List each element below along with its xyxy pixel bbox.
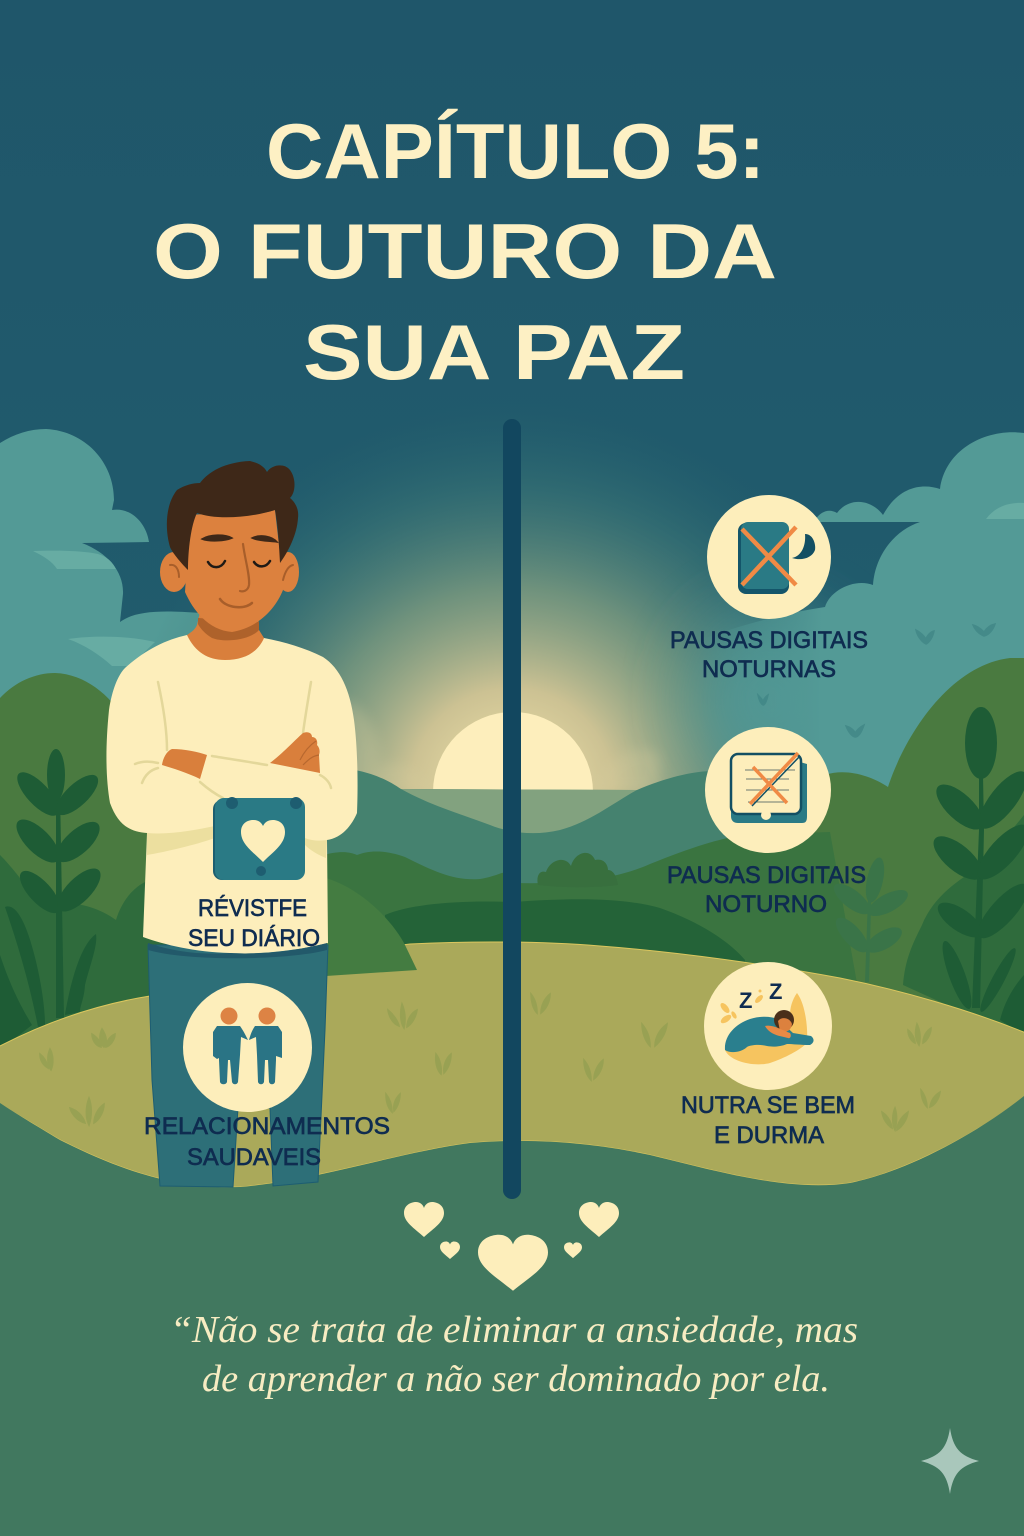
arms	[162, 749, 207, 779]
left green hill	[0, 673, 170, 1060]
label: relacionamentos saudaveis	[144, 1113, 390, 1171]
middle green hill	[320, 832, 860, 1000]
label: pausas digitais noturno: PAUSAS DIGITAIS	[667, 862, 866, 889]
label: relacionamentos saudaveis: SAUDAVEIS	[187, 1144, 321, 1171]
sun glow	[100, 400, 924, 970]
label: revisite seu diario: SEU DIÁRIO	[188, 925, 320, 952]
icon: sleeping person	[704, 962, 832, 1090]
label: pausas digitais noturnas	[670, 627, 868, 683]
grass tufts	[40, 994, 940, 1130]
facial features	[170, 535, 293, 607]
clouds right	[695, 432, 1024, 800]
title: CAPÍTULO 5:	[266, 107, 765, 195]
label: pausas digitais noturnas: NOTURNAS	[702, 656, 836, 683]
right green hill	[640, 658, 1024, 1060]
label: revisite seu diario: RÉVISTFE	[198, 895, 307, 922]
central divider bar	[503, 419, 521, 1199]
ears	[160, 552, 299, 592]
distant teal hills	[320, 768, 860, 930]
label: revisite seu diario	[188, 895, 320, 952]
bush	[537, 853, 618, 887]
label: nutra se bem e durma: NUTRA SE BEM	[681, 1092, 855, 1119]
label: relacionamentos saudaveis: RELACIONAMENTOS	[144, 1113, 390, 1140]
background sky	[0, 0, 1024, 1200]
sweater shading	[135, 682, 331, 798]
hearts	[404, 1202, 619, 1291]
hair	[167, 461, 298, 570]
bottom band	[0, 1096, 1024, 1536]
diary icon	[213, 797, 305, 880]
front-left hill	[326, 878, 417, 976]
icon: sleeping person: Z	[739, 988, 752, 1013]
quote: “Não se trata de eliminar a ansiedade, mas	[170, 1309, 858, 1351]
sparkle star	[921, 1428, 979, 1494]
neck	[187, 612, 264, 668]
label: nutra se bem e durma: E DURMA	[714, 1122, 824, 1149]
label: nutra se bem e durma	[681, 1092, 855, 1149]
meadow	[0, 942, 1024, 1187]
neck shadow	[198, 618, 259, 640]
icon: relationships	[183, 983, 312, 1112]
label: pausas digitais noturno: NOTURNO	[705, 891, 827, 918]
pale clouds near sun	[345, 700, 661, 792]
trousers	[148, 945, 328, 1187]
quote	[170, 1309, 858, 1400]
sun	[433, 712, 593, 872]
darker green undergrowth left	[0, 855, 170, 1060]
title: SUA PAZ	[303, 308, 685, 396]
icon: mug with x	[707, 495, 831, 619]
sweater	[106, 635, 358, 953]
quote: de aprender a não ser dominado por ela.	[202, 1358, 830, 1400]
plant right	[927, 707, 1024, 1035]
face	[185, 510, 283, 632]
icon: notebook with x	[705, 727, 831, 853]
label: pausas digitais noturnas: PAUSAS DIGITAIS	[670, 627, 868, 654]
darker green undergrowth right	[903, 815, 1024, 1040]
plant left	[0, 749, 107, 1050]
dark green valley	[385, 899, 745, 1000]
title	[153, 107, 777, 396]
label: pausas digitais noturno	[667, 862, 866, 918]
icon: sleeping person: Z	[769, 979, 782, 1004]
faint plant	[829, 856, 912, 982]
title: O FUTURO DA	[153, 207, 777, 295]
clouds left	[0, 429, 200, 760]
person	[106, 461, 358, 1187]
